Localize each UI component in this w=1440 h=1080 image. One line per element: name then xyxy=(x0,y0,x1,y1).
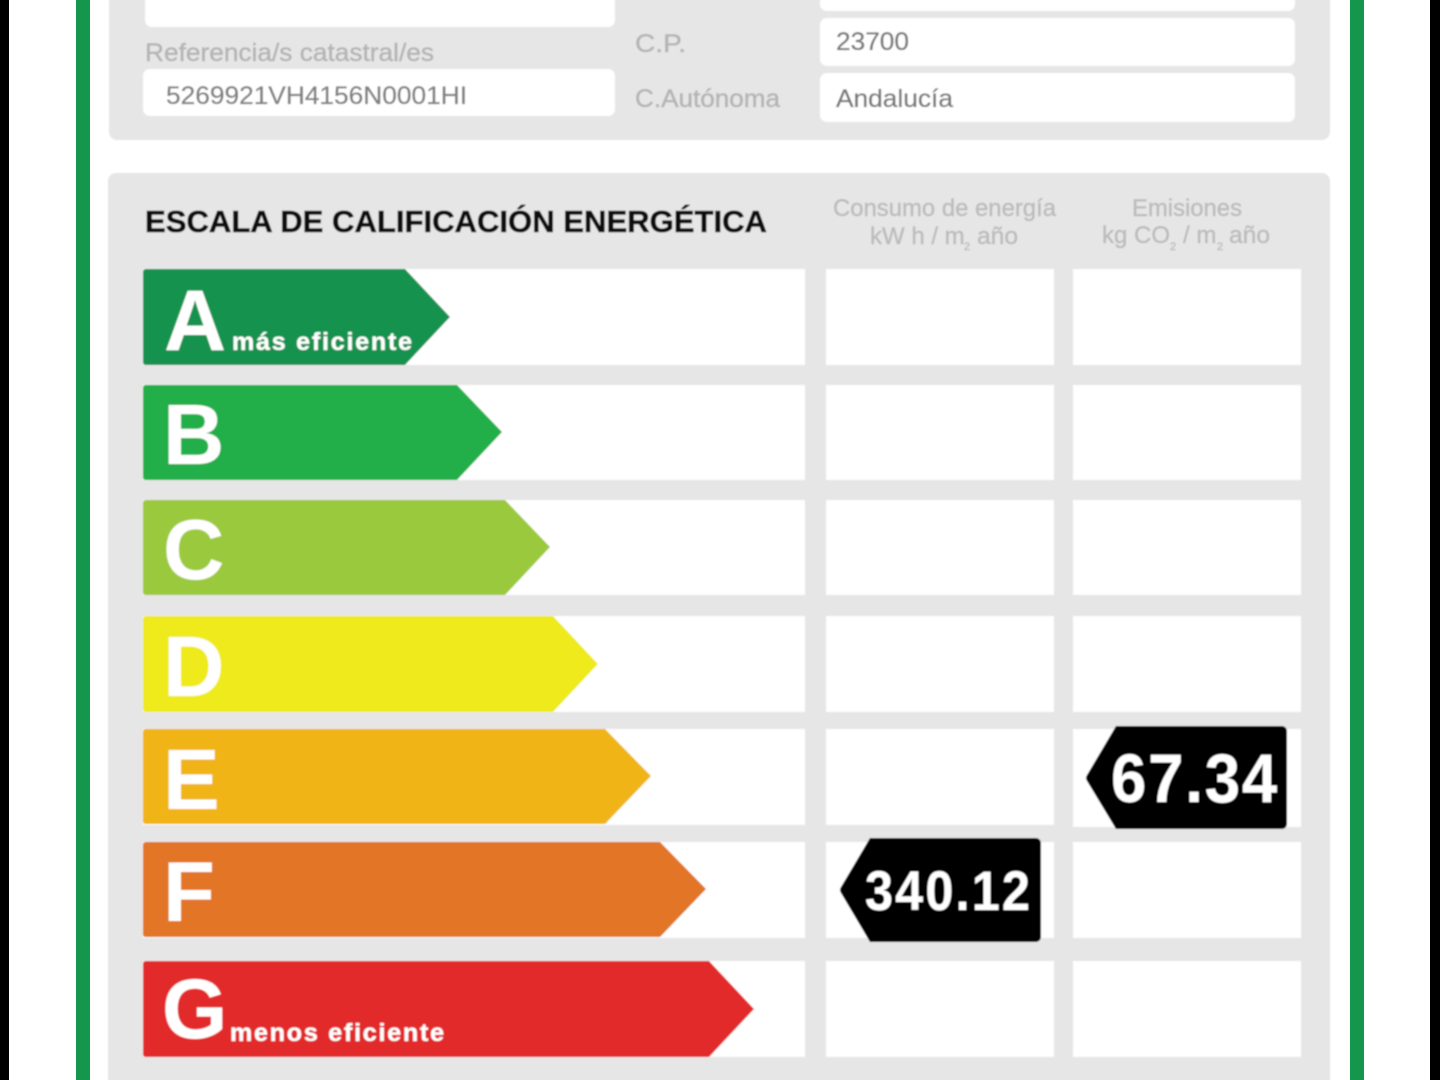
column header: emissions: / m xyxy=(1183,222,1216,249)
rating bar G: G xyxy=(162,962,227,1056)
column header: emissions: 2 xyxy=(1217,241,1223,253)
column header: emissions xyxy=(1102,195,1270,253)
field: postal code xyxy=(820,18,1295,66)
rating bar A: más eficiente xyxy=(232,328,412,356)
rating bar E: E xyxy=(163,733,220,828)
rating bar G xyxy=(143,961,754,1057)
panel: energy rating scale xyxy=(108,173,1330,1080)
field: top right box xyxy=(820,0,1295,11)
field: empty address box xyxy=(145,0,615,27)
rating bar A xyxy=(143,269,450,369)
rating bar F xyxy=(143,842,706,940)
column header: energy consumption: Consumo de energía xyxy=(833,195,1057,222)
row backgrounds and value cells xyxy=(143,269,1301,1057)
column header: emissions: año xyxy=(1229,222,1270,249)
rating bar D: D xyxy=(163,620,224,715)
value marker: energy consumption 340.12: 340.12 xyxy=(865,861,1032,923)
label: cadastral reference: Referencia/s catastral/es xyxy=(145,39,434,67)
label: postal code: C.P. xyxy=(635,30,686,58)
rating bar D xyxy=(143,616,598,715)
rating bar B: B xyxy=(163,388,224,483)
field: autonomous community xyxy=(820,73,1295,122)
column header: emissions: Emisiones xyxy=(1132,195,1242,222)
rating bar C xyxy=(143,500,550,598)
rating bar C: C xyxy=(163,503,224,598)
value marker: energy consumption 340.12 xyxy=(840,838,1041,942)
column header: energy consumption: año xyxy=(977,223,1018,250)
field: cadastral reference: 5269921VH4156N0001HI xyxy=(166,82,467,110)
heading: ESCALA DE CALIFICACIÓN ENERGÉTICA xyxy=(145,203,767,239)
rating bar A: A xyxy=(164,273,226,369)
label: autonomous community: C.Autónoma xyxy=(635,85,780,113)
field: autonomous community: Andalucía xyxy=(836,85,953,113)
value marker: emissions 67.34: 67.34 xyxy=(1111,741,1279,818)
column header: energy consumption: 2 xyxy=(964,241,970,253)
column header: emissions: 2 xyxy=(1170,241,1176,253)
rating bar F: F xyxy=(163,845,215,940)
field: postal code: 23700 xyxy=(836,28,909,56)
panel: property data xyxy=(109,0,1330,140)
rating bar G: menos eficiente xyxy=(230,1019,444,1047)
column header: energy consumption xyxy=(833,195,1057,253)
column header: energy consumption: kW h / m xyxy=(870,223,965,250)
rating bar E xyxy=(143,729,651,828)
value marker: emissions 67.34 xyxy=(1086,726,1287,829)
column header: emissions: kg CO xyxy=(1102,222,1170,249)
field: cadastral reference xyxy=(143,69,615,116)
rating bar B xyxy=(143,385,502,483)
